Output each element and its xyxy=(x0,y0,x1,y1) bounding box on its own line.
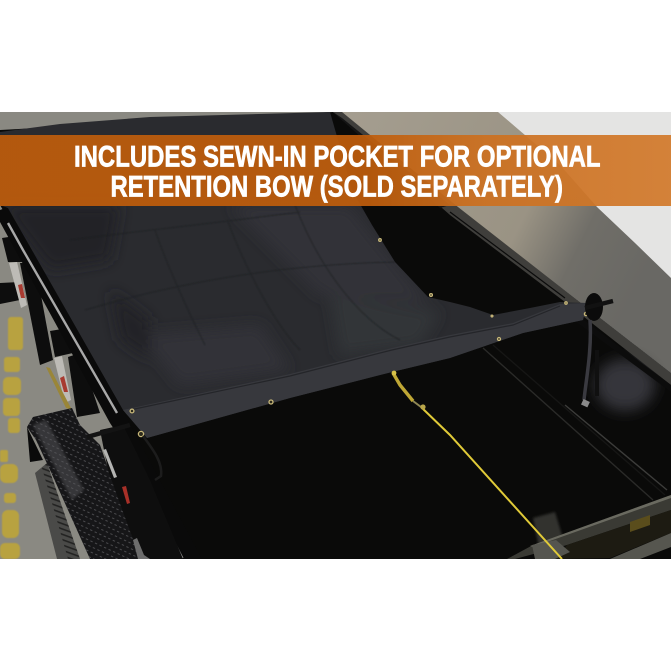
bed channel xyxy=(483,345,667,500)
white wall xyxy=(498,112,671,278)
tarp shading and folds xyxy=(17,209,428,376)
reflected patch xyxy=(532,512,564,546)
glossy wall reflection xyxy=(595,359,655,411)
left stickers xyxy=(9,262,72,410)
floor yellow markings xyxy=(0,317,23,559)
left retention rod xyxy=(87,425,130,437)
rear tailgate beams xyxy=(507,495,671,559)
banner heading: RETENTION BOW (SOLD SEPARATELY) xyxy=(110,170,563,204)
left bungee xyxy=(143,436,161,480)
frame beside fender xyxy=(100,425,183,559)
banner heading xyxy=(74,140,600,204)
diamond plate fender xyxy=(27,408,140,559)
right concrete floor xyxy=(333,112,671,382)
tarp hem with sewn-in pocket xyxy=(123,303,587,438)
photo: trailer with mesh tarp xyxy=(0,112,671,559)
tire xyxy=(35,463,80,559)
mesh tarp xyxy=(0,112,588,438)
trailer bed interior xyxy=(0,112,671,559)
right side rail xyxy=(333,112,671,385)
left concrete floor xyxy=(0,112,340,559)
banner xyxy=(0,135,671,206)
yellow strap xyxy=(392,371,562,559)
grommets xyxy=(130,239,588,437)
right retention rod and disc xyxy=(581,293,613,407)
infographic xyxy=(0,112,671,559)
left side rail xyxy=(0,207,202,559)
left frame posts and brackets xyxy=(0,236,100,417)
